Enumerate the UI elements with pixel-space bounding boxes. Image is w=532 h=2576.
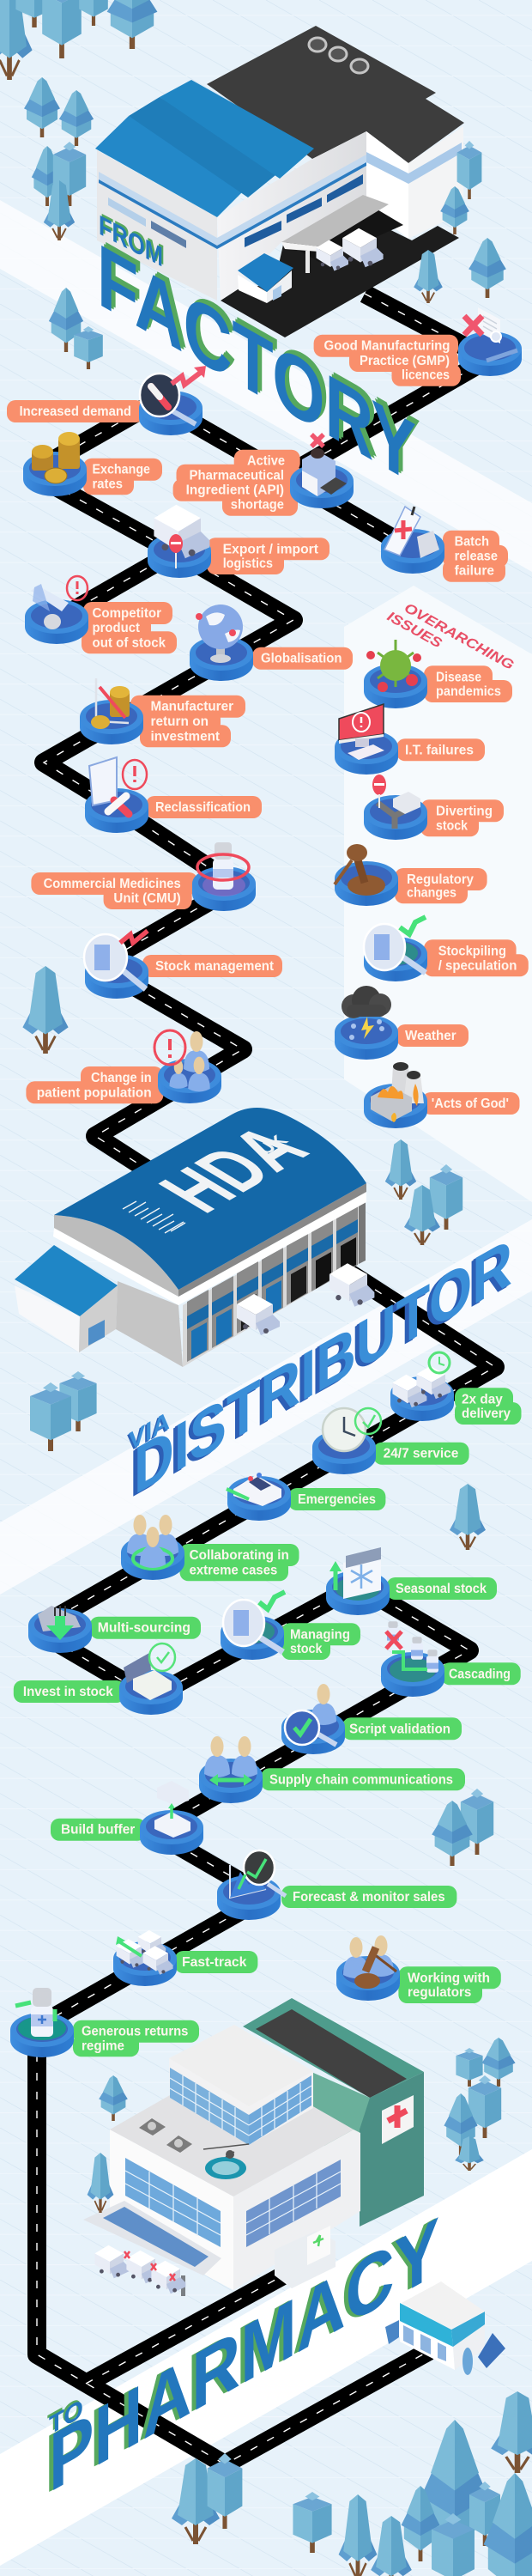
- node: Competitor product out of stock: [25, 576, 177, 653]
- trees: bottom forest: [172, 2391, 532, 2576]
- node: Competitor product out of stock: product: [93, 621, 140, 635]
- icon: globe with pins: [196, 605, 243, 663]
- node: Stockpiling / speculation: [364, 917, 529, 981]
- heading: from: FROM: [100, 208, 165, 272]
- node: Change in patient population: Change in: [91, 1071, 152, 1085]
- node: Fast-track: [113, 1930, 257, 1986]
- rooftop AC units: [139, 2118, 192, 2153]
- node: 2x day delivery: delivery: [462, 1406, 511, 1421]
- node: Weather: [335, 986, 469, 1060]
- node: Fast-track: Fast-track: [182, 1955, 247, 1970]
- node: Change in patient population: [26, 1030, 221, 1103]
- icon: certificate with red cross: [464, 307, 517, 361]
- heading: pharmacy: PHARMACY: [45, 2200, 435, 2512]
- node: Batch release failure: release: [455, 550, 498, 564]
- node: Active Pharmaceutical Ingredient shortage: Pharmaceutical: [189, 469, 284, 483]
- node: Disease pandemics: [364, 640, 512, 708]
- node: Diverting stock: stock: [436, 818, 468, 833]
- node: Working with regulators: Working with: [408, 1971, 490, 1985]
- HDA distributor warehouse: [15, 1108, 374, 1367]
- icon: two vans and green clock: [392, 1352, 450, 1407]
- node: Batch release failure: Batch: [455, 535, 489, 550]
- node: Collaborating in extreme cases: Collaborating in: [190, 1548, 289, 1563]
- heading: pharmacy: PHARMACY: [46, 2199, 437, 2511]
- node: Generous returns regime: regime: [82, 2038, 124, 2053]
- node: Disease pandemics: pandemics: [436, 684, 501, 699]
- node: Increased demand: [7, 366, 206, 435]
- icon: boxes and green arrow: [38, 1606, 81, 1640]
- node: Supply chain communications: Supply chain communications: [269, 1772, 453, 1787]
- node: 2x day delivery: [390, 1352, 522, 1425]
- node: Seasonal stock: Seasonal stock: [396, 1582, 487, 1596]
- node: Good Manufacturing Practice licences: Practice (GMP): [360, 354, 450, 368]
- icon: gold coins: [32, 432, 80, 483]
- node: Generous returns regime: Generous returns: [82, 2025, 188, 2039]
- node: I.T. failures: I.T. failures: [405, 743, 474, 757]
- node: Regulatory changes: Regulatory: [407, 872, 474, 887]
- node: Good Manufacturing Practice licences: licences: [402, 368, 450, 383]
- icon: magnifier and green arrow: [364, 917, 426, 973]
- node: Weather: Weather: [405, 1029, 456, 1043]
- node: Collaborating in extreme cases: extreme cases: [190, 1563, 277, 1577]
- heading: factory: FACTORY: [97, 224, 416, 504]
- node: Batch release failure: [381, 507, 508, 582]
- heading: factory: FACTORY: [100, 222, 419, 502]
- node: Manufacturer return on investment: [80, 678, 245, 747]
- node: Good Manufacturing Practice licences: Good Manufacturing: [324, 339, 450, 354]
- road: final stretch to hospital and pharmacy: [37, 2035, 429, 2464]
- icon: magnifier with pill and red arrow: [140, 366, 206, 424]
- trees: right of factory: [414, 141, 506, 303]
- loading bays: [187, 1199, 366, 1362]
- node: Increased demand: Increased demand: [19, 404, 131, 419]
- factory building: [95, 26, 464, 337]
- node: Active Pharmaceutical Ingredient shortage: Active: [247, 454, 285, 469]
- gatehouse hut: [238, 253, 293, 303]
- white band behind FACTORY: [0, 200, 532, 572]
- node: Acts of God: 'Acts of God': [432, 1097, 509, 1111]
- icon: card, cash and green check: [124, 1643, 175, 1700]
- node: Regulatory changes: changes: [407, 885, 456, 900]
- node: Build buffer: [51, 1781, 203, 1855]
- heading: overarching issues: [384, 601, 516, 673]
- icon: three people in green ring: [127, 1515, 178, 1569]
- node: Emergencies: [227, 1473, 385, 1521]
- node: Cascading: [381, 1621, 521, 1697]
- node: I.T. failures: [335, 704, 485, 775]
- node: Working with regulators: regulators: [408, 1985, 471, 2000]
- icon: clipboard with red cross: [384, 507, 439, 558]
- icon: gavel: [335, 844, 385, 896]
- node: Acts of God: [364, 1062, 520, 1128]
- node: Stockpiling / speculation: / speculation: [438, 958, 517, 973]
- icon: truck and no-entry sign: [154, 505, 209, 568]
- node: Generous returns regime: [10, 1988, 199, 2057]
- node: Forecast & monitor sales: Forecast & monitor sales: [293, 1890, 445, 1905]
- panel: overarching issues: [344, 586, 532, 1202]
- node: 24/7 service: [312, 1408, 469, 1474]
- road: distributor zig-zag: [42, 1269, 495, 2024]
- node: Diverting stock: [364, 775, 504, 840]
- white band behind PHARMACY: [0, 2149, 532, 2566]
- heading: to: TO: [49, 2393, 83, 2441]
- node: 24/7 service: 24/7 service: [384, 1447, 459, 1461]
- node: Diverting stock: Diverting: [436, 804, 493, 818]
- pharmacy shop: [385, 2281, 505, 2375]
- icon: clipboard, capsule and alert: [89, 757, 147, 814]
- icon: green virus: [366, 640, 421, 692]
- heading: factory: [97, 221, 420, 504]
- icon: calendar with snowflake: [329, 1547, 381, 1601]
- node: Globalisation: Globalisation: [261, 652, 342, 666]
- icon: bottles and green steps: [386, 1621, 438, 1682]
- icon: magnifier and red arrow: [84, 931, 148, 989]
- node: Commercial Medicines Unit: Unit (CMU): [113, 891, 181, 906]
- HDA logo: UK: [251, 1132, 294, 1157]
- icon: production machine with red cross: [302, 434, 347, 496]
- heading: via: VIA: [129, 1405, 170, 1457]
- icon: bottle with red cycle: [197, 842, 249, 896]
- node: Stock management: [84, 931, 282, 999]
- icon: computer with alert: [339, 704, 384, 760]
- helipad: [203, 2144, 249, 2179]
- node: Script validation: Script validation: [349, 1722, 450, 1736]
- heading: factory: FACTORY: [101, 221, 420, 501]
- node: Good Manufacturing Practice licences: [314, 307, 522, 386]
- node: Invest in stock: [14, 1643, 183, 1715]
- node: Managing stock: stock: [290, 1642, 323, 1656]
- node: Script validation: [281, 1684, 462, 1754]
- icon: storm cloud: [342, 986, 391, 1040]
- node: Reclassification: [85, 757, 262, 833]
- HDA logo: HDA: [139, 1114, 327, 1224]
- ambulances: [94, 2245, 185, 2293]
- node: Build buffer: Build buffer: [61, 1823, 135, 1838]
- node: Invest in stock: Invest in stock: [23, 1685, 113, 1699]
- heading: via: VIA: [127, 1406, 168, 1459]
- node: Stockpiling / speculation: Stockpiling: [438, 944, 506, 958]
- node: Export / import logistics: Export / import: [223, 542, 318, 556]
- icon: alarm clock with green check: [323, 1408, 381, 1451]
- node: Multi-sourcing: [28, 1606, 201, 1653]
- icon: empty bottle and alert: [31, 576, 88, 629]
- node: Stock management: Stock management: [155, 959, 274, 974]
- node: Supply chain communications: [199, 1736, 465, 1803]
- node: Manufacturer return on investment: Manufacturer: [151, 700, 233, 714]
- icon: two people and gavel: [343, 1935, 396, 1989]
- node: Exchange rates: Exchange: [93, 463, 150, 477]
- icon: falling chart with coins: [91, 678, 130, 729]
- node: 2x day delivery: 2x day: [462, 1392, 503, 1406]
- trees: mid section: [22, 966, 462, 1245]
- node: Commercial Medicines Unit: [31, 842, 256, 911]
- node: Competitor product out of stock: out of stock: [93, 635, 166, 650]
- icon: chart with magnifier: [230, 1850, 286, 1898]
- node: Competitor product out of stock: Competitor: [93, 606, 161, 621]
- node: Managing stock: Managing: [290, 1627, 350, 1642]
- icon: magnifier and green arrow: [223, 1592, 285, 1652]
- node: Active Pharmaceutical Ingredient shortage: Ingredient (API): [186, 483, 284, 498]
- node: Manufacturer return on investment: return on: [151, 714, 209, 729]
- icon: stock box with arrow: [154, 1781, 190, 1838]
- node: Collaborating in extreme cases: [121, 1515, 299, 1581]
- icon: three vans with arrows: [116, 1930, 173, 1975]
- node: Globalisation: [190, 605, 353, 681]
- icon: two people and green double arrow: [204, 1736, 257, 1786]
- node: Working with regulators: [336, 1935, 501, 2003]
- icon: emergency car: [227, 1473, 281, 1506]
- trees: top-left cluster: [0, 0, 157, 369]
- road: factory to increased demand and batch release: [171, 294, 488, 550]
- heading: pharmacy: PHARMACY: [49, 2198, 439, 2510]
- icon: factory on fire: [371, 1062, 424, 1122]
- heading: to: TO: [47, 2391, 82, 2439]
- icon: bottle with return arrows: [15, 1988, 66, 2040]
- HDA logo: [123, 1114, 327, 1233]
- node: Managing stock: [221, 1592, 360, 1660]
- node: Multi-sourcing: Multi-sourcing: [98, 1621, 190, 1636]
- icon: person and magnifier check: [285, 1684, 336, 1745]
- road: manufacturer zig-zag: [44, 395, 293, 1169]
- node: Manufacturer return on investment: investment: [151, 729, 220, 744]
- node: Regulatory changes: [335, 844, 487, 906]
- node: Export / import logistics: logistics: [223, 556, 273, 571]
- node: Forecast & monitor sales: [217, 1850, 456, 1920]
- node: Active Pharmaceutical Ingredient shortage: shortage: [231, 498, 284, 513]
- node: Export / import logistics: [148, 505, 329, 578]
- hospital building: [83, 1998, 424, 2296]
- node: Active Pharmaceutical Ingredient shortage: [173, 434, 354, 516]
- node: Exchange rates: [23, 432, 162, 496]
- trees: distributor section: [30, 1371, 486, 1550]
- node: Disease pandemics: Disease: [436, 670, 481, 684]
- node: Emergencies: Emergencies: [298, 1492, 376, 1507]
- heading: overarching issues: OVERARCHING: [402, 601, 516, 673]
- node: Cascading: Cascading: [449, 1667, 511, 1681]
- node: Commercial Medicines Unit: Commercial Medicines: [44, 877, 181, 891]
- icon: forked road, medical box, no-entry: [372, 775, 420, 829]
- node: Change in patient population: patient population: [37, 1085, 152, 1100]
- icon: patients and alert: [154, 1030, 210, 1091]
- white band behind DISTRIBUTOR: [0, 1219, 532, 1595]
- heading: overarching issues: ISSUES: [384, 610, 444, 652]
- node: Exchange rates: rates: [93, 477, 123, 491]
- trees: pharmacy section: [88, 1789, 516, 2213]
- node: Seasonal stock: [326, 1547, 497, 1615]
- node: Reclassification: Reclassification: [155, 800, 251, 815]
- heading: from: FROM: [99, 210, 163, 274]
- node: Batch release failure: failure: [455, 564, 494, 579]
